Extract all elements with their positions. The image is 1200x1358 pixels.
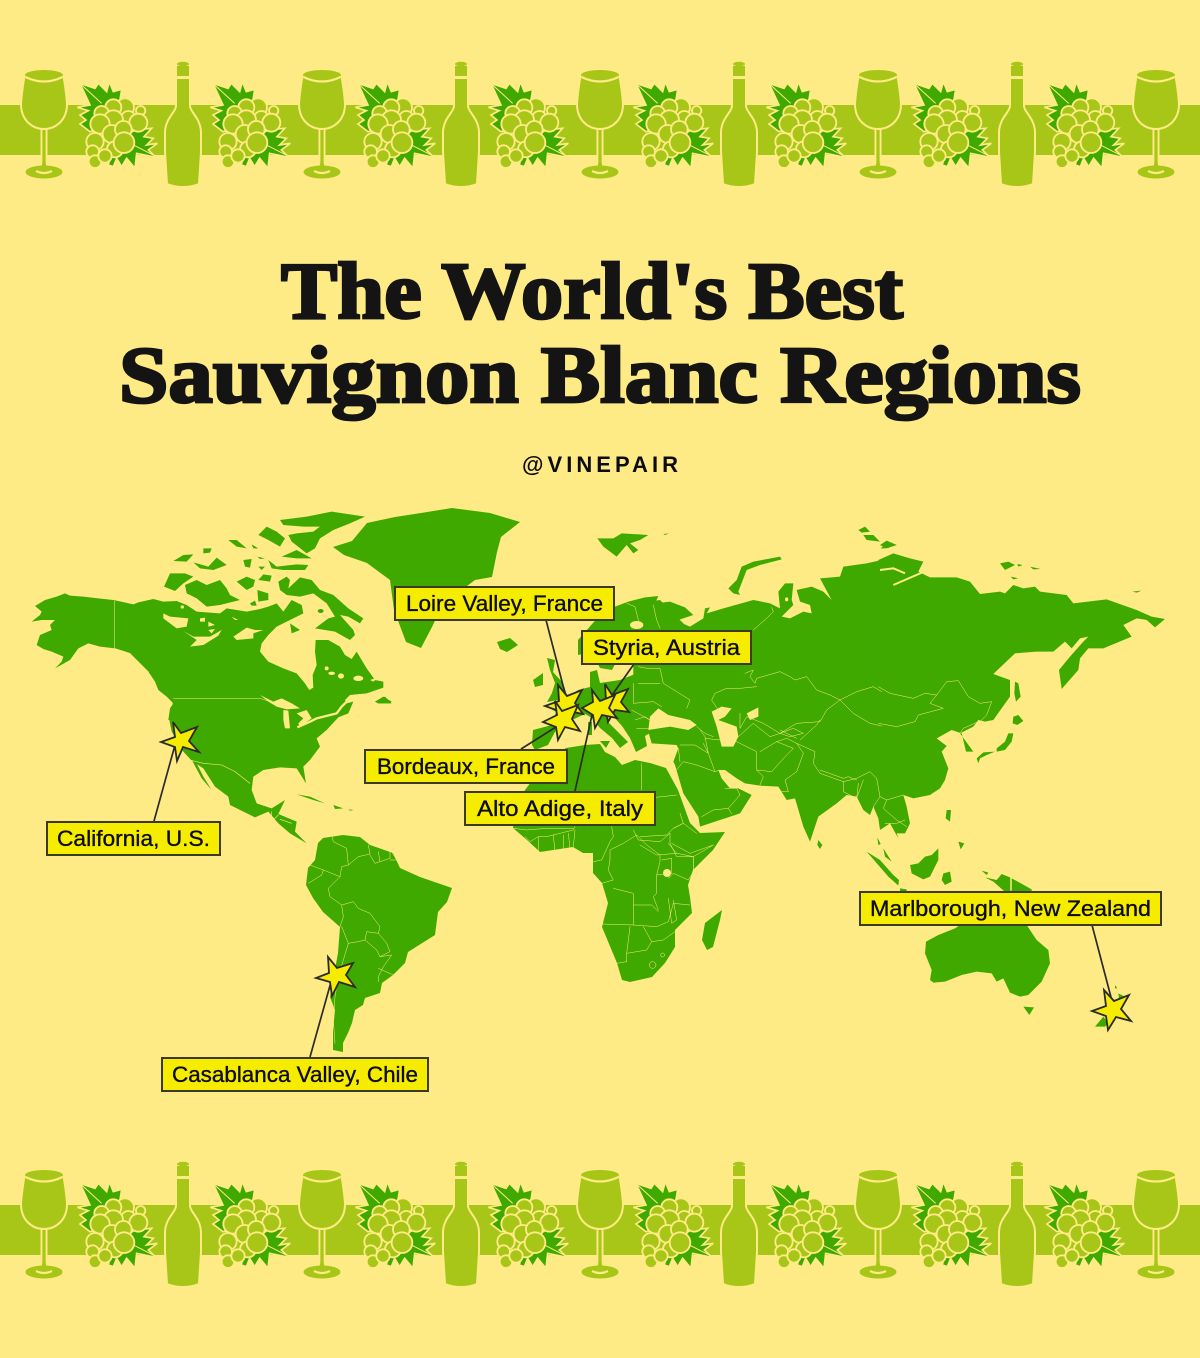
label: Marlborough, New Zealand: Marlborough, New Zealand [870, 896, 1151, 921]
Canadian lakes [163, 605, 380, 682]
United States, Mexico and Central America [169, 690, 392, 843]
Taymyr coastal inlets [880, 568, 922, 585]
Europe [532, 600, 700, 752]
star: Bordeaux [543, 701, 580, 740]
borders: Far East [878, 681, 992, 733]
borders: Europe and Central Asia [627, 603, 882, 737]
leader lines [154, 620, 1112, 1057]
label: Loire Valley, France [395, 587, 614, 620]
Canada and Alaska [32, 512, 392, 720]
Northern Russia and Central Asia [597, 527, 897, 760]
label: Styria, Austria: Styria, Austria [593, 635, 741, 660]
title: The World's Best [281, 246, 903, 336]
label: California, U.S. [47, 822, 220, 855]
label: Marlborough, New Zealand [860, 892, 1161, 925]
Iceland [497, 638, 518, 652]
title [119, 246, 1081, 420]
label: Loire Valley, France: Loire Valley, France [406, 591, 603, 616]
borders: Alaska, US, Mexico [114, 601, 270, 702]
star: Casablanca Valley [316, 957, 355, 996]
top decorative band: glasses, grapes and bottles [0, 62, 1200, 187]
label: Alto Adige, Italy [465, 792, 655, 825]
star: Marlborough [1092, 990, 1131, 1030]
border: Papua New Guinea [1010, 877, 1012, 890]
Middle East, South and Southeast Asia [648, 720, 945, 886]
label: California, U.S.: California, U.S. [57, 826, 210, 851]
Great Lakes and St Lawrence [260, 695, 360, 728]
borders: South America and Africa [308, 827, 713, 1043]
Madagascar [702, 910, 722, 950]
bottom decorative band: glasses, grapes and bottles [0, 1162, 1200, 1287]
label: Styria, Austria [582, 631, 751, 664]
Siberia, Far East and north China [878, 541, 1165, 780]
borders: Middle East and South Asia [640, 720, 907, 872]
world map [32, 508, 1165, 1052]
British Isles and Mediterranean islands [533, 658, 610, 748]
label: Bordeaux, France: Bordeaux, France [377, 754, 555, 779]
Africa [513, 744, 725, 982]
Greenland [333, 508, 520, 648]
star: Alto Adige [582, 690, 617, 728]
label: Bordeaux, France [365, 750, 567, 783]
star: Loire Valley [545, 685, 583, 724]
Lake Victoria [663, 869, 671, 877]
star: California [161, 722, 199, 761]
byline: @VINEPAIR [522, 452, 678, 477]
label: Casablanca Valley, Chile: Casablanca Valley, Chile [172, 1062, 418, 1087]
Black Sea, Caspian and Aral [630, 597, 788, 747]
label: Alto Adige, Italy: Alto Adige, Italy [477, 796, 643, 821]
label: Casablanca Valley, Chile [162, 1058, 428, 1091]
star: Styria [594, 684, 629, 722]
title: Sauvignon Blanc Regions [119, 330, 1081, 420]
South America [306, 835, 452, 1052]
Oceania [900, 810, 1128, 1027]
